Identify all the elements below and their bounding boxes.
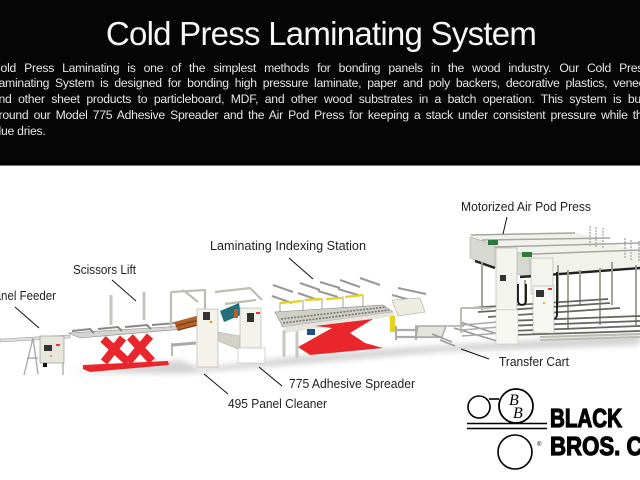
775 adhesive spreader [215, 288, 265, 363]
label: 775 Adhesive Spreader: 775 Adhesive Spreader [289, 377, 415, 391]
label: Motorized Air Pod Press: Motorized Air Pod Press [461, 200, 591, 214]
panel: header band [0, 0, 640, 166]
label: Transfer Cart [461, 349, 569, 369]
label: Scissors Lift: Scissors Lift [73, 263, 136, 277]
label: Scissors Lift [73, 263, 136, 301]
scissors lift [68, 292, 184, 372]
motorized air pod press [461, 226, 640, 344]
text block: description: Laminating System is designed for bonding high pressure laminate, paper and poly backers, decorative plastics, veneer [0, 76, 640, 90]
logo: Black Bros. Co.: ® [537, 441, 542, 448]
label: 495 Panel Cleaner [204, 374, 327, 411]
label: Panel Feeder [0, 289, 56, 328]
text block: description [0, 60, 640, 138]
floor shadow [70, 334, 640, 374]
transfer cart [390, 288, 514, 346]
title: Cold Press Laminating System [106, 15, 536, 52]
logo: Black Bros. Co.: B [513, 405, 523, 422]
label: 495 Panel Cleaner: 495 Panel Cleaner [228, 397, 327, 411]
logo: Black Bros. Co. [467, 389, 640, 469]
laminating indexing station [272, 278, 395, 358]
label: Motorized Air Pod Press [461, 200, 591, 234]
text block: description: and other sheet products to particleboard, MDF, and other wood substrates in a batch operation. This system is built [0, 92, 640, 106]
label: Laminating Indexing Station [210, 239, 366, 279]
logo: Black Bros. Co.: B [509, 392, 519, 409]
text block: description: around our Model 775 Adhesive Spreader and the Air Pod Press for keeping a stack under consistent pressure while the [0, 108, 640, 122]
label: Transfer Cart: Transfer Cart [499, 355, 569, 369]
495 panel cleaner [171, 290, 218, 367]
logo: Black Bros. Co.: BLACK [550, 403, 622, 433]
label: Laminating Indexing Station: Laminating Indexing Station [210, 239, 366, 253]
panel feeder machine [0, 335, 70, 375]
red scissor lift [298, 319, 383, 355]
text block: description: Cold Press Laminating is one of the simplest methods for bonding panels in the wood industry. Our Cold Press [0, 60, 640, 74]
label: 775 Adhesive Spreader [259, 367, 415, 391]
